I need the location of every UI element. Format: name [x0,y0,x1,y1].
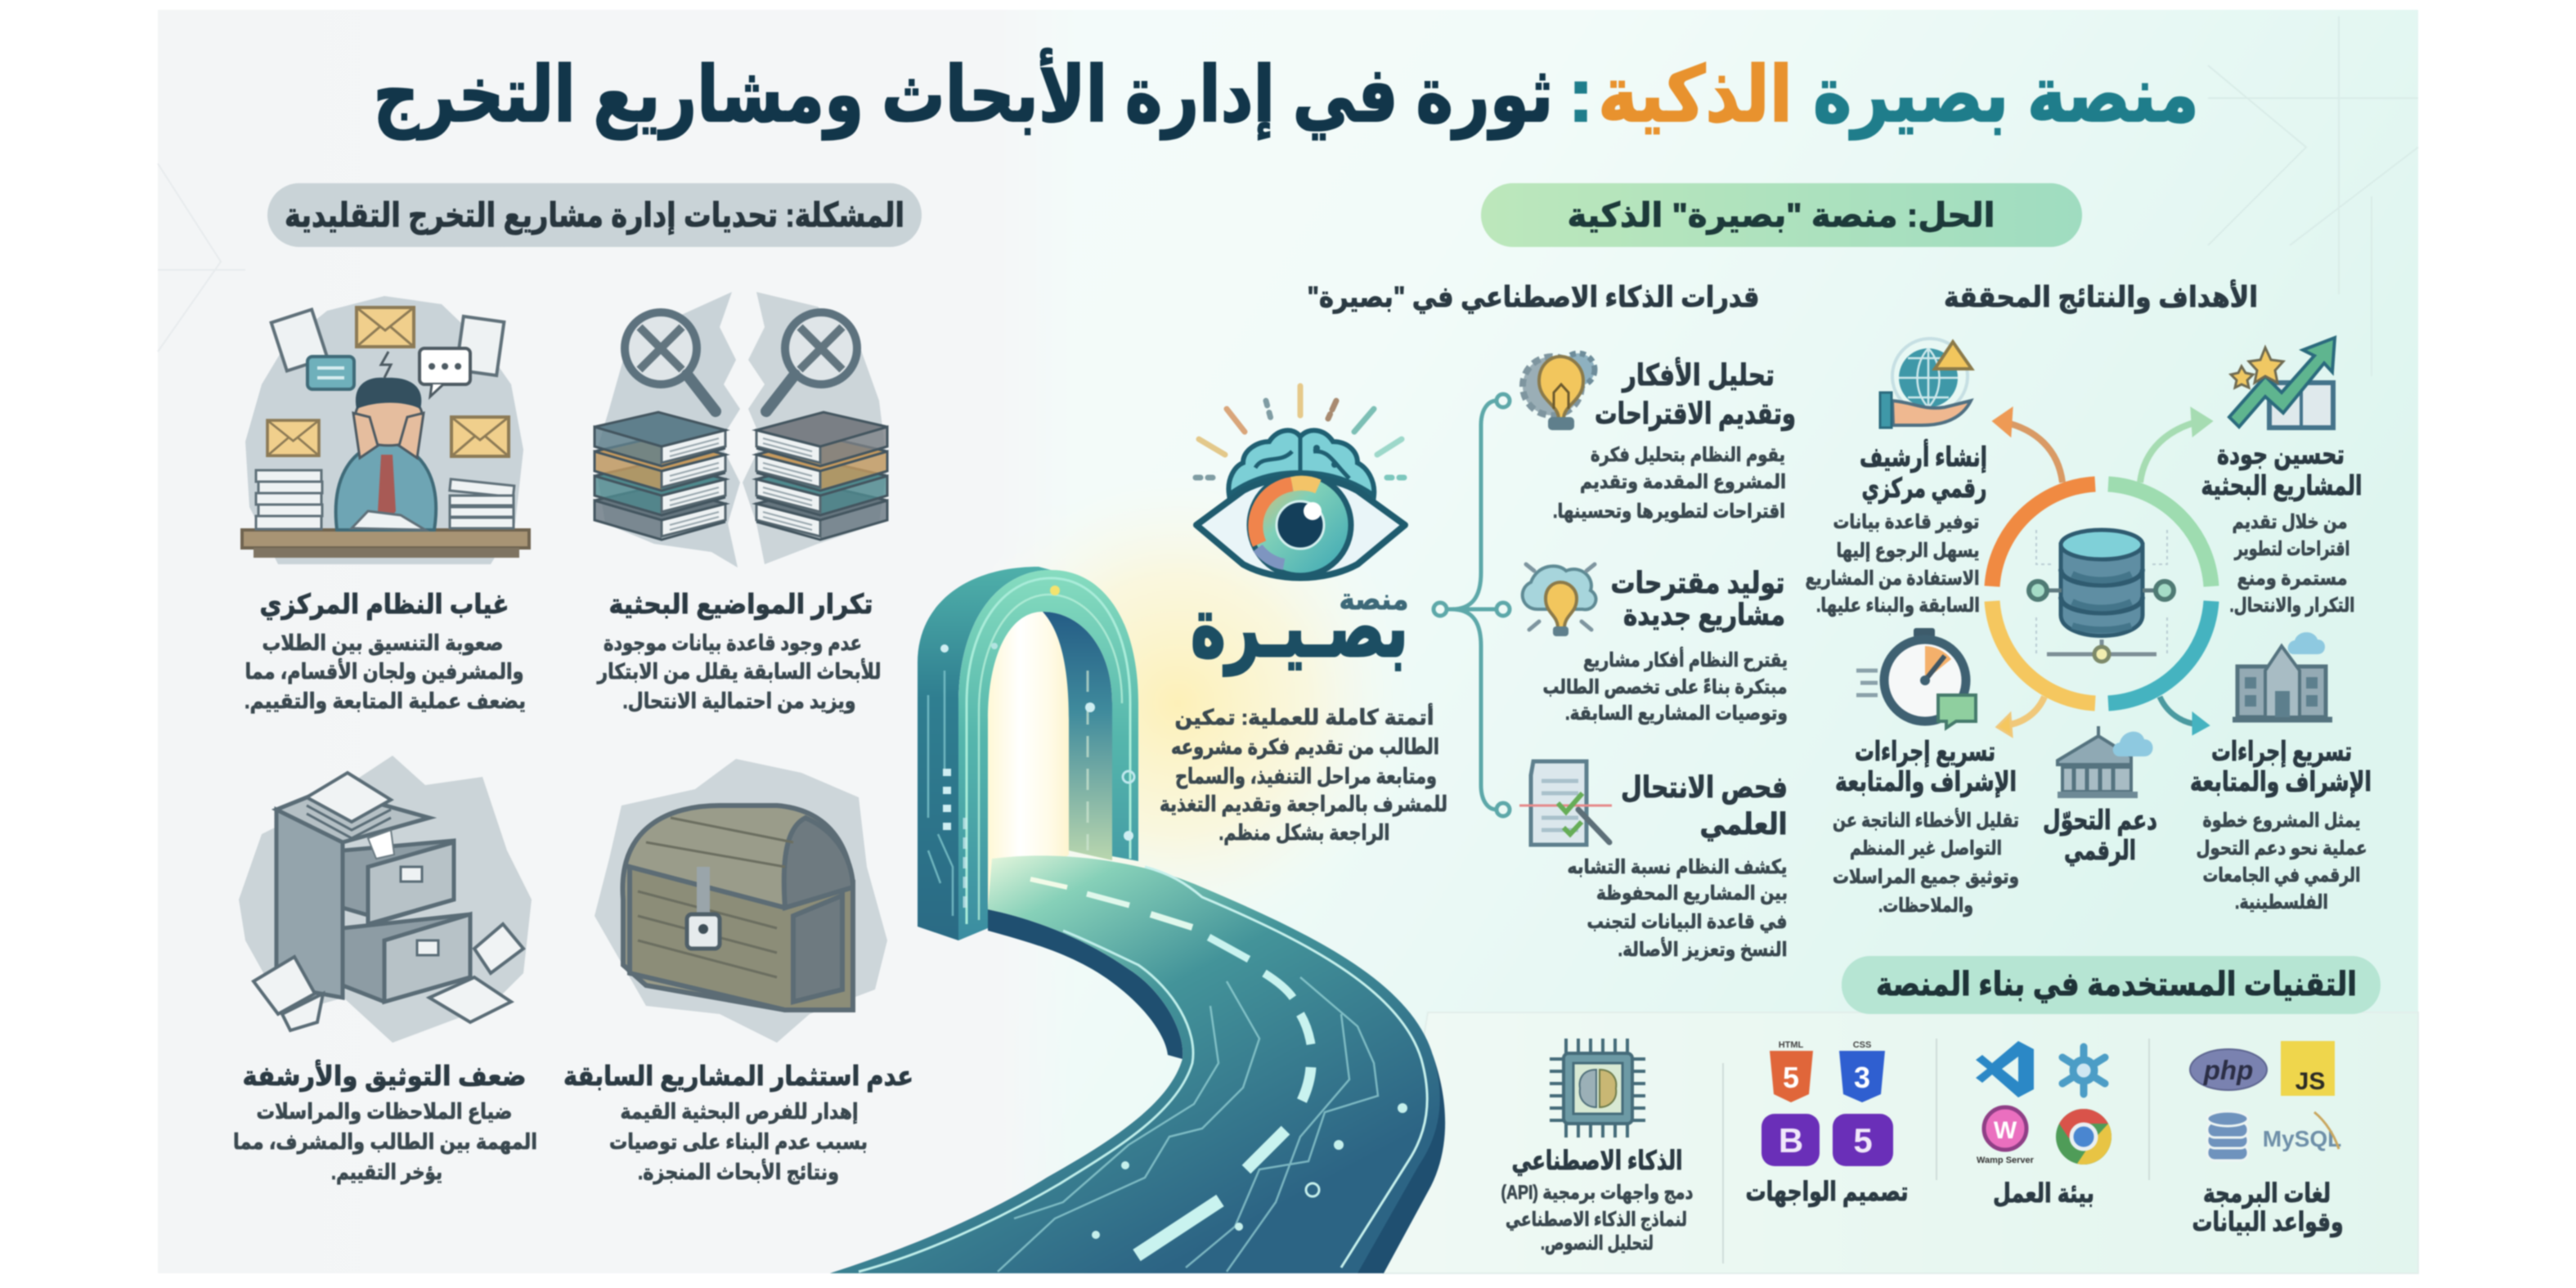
goal description: التكرار والانتحال. [2229,595,2355,617]
goal title [1835,736,2017,798]
problem description: ويزيد من احتمالية الانتحال. [623,689,855,714]
capability title: العلمي [1699,807,1788,841]
tech description: لتحليل النصوص. [1541,1232,1654,1254]
problem title: غياب النظام المركزي [260,589,509,621]
title: الذكية [1598,52,1793,137]
logo: Baseera eye and brain [1160,386,1447,846]
problem description: يؤخر التقييم. [331,1160,442,1185]
goal title [2190,736,2372,798]
goal title: الإشراف والمتابعة [2190,766,2372,798]
arrow: to digital archive [1994,409,2062,482]
goal title: تسريع إجراءات [2211,736,2352,768]
icon: WampServer: Wamp Server [1977,1156,2035,1165]
goal title and description: دعم التحوّل [2043,805,2157,837]
problem description: والمشرفين ولجان الأقسام، مما [245,658,523,684]
goal title: المشاريع البحثية [2201,470,2362,502]
capability title [1595,357,1796,431]
capability description: بين المشاريع المحفوظة [1596,882,1788,904]
capability description [1567,856,1788,961]
icon: PHP: php [2203,1055,2253,1085]
arrow: to research quality [2140,409,2211,482]
goal description: اقتراحات لتطوير [2234,538,2350,560]
problem section heading pill: المشكلة: تحديات إدارة مشاريع التخرج التقليدية [285,196,904,236]
capability: generating project proposals [1523,564,1788,725]
icon: Chrome [2056,1109,2112,1165]
platform description: للمشرف بالمراجعة وتقديم التغذية [1160,792,1447,817]
tech column dividers [1723,1039,2149,1263]
goal title: تحسين جودة [2217,439,2345,471]
goal title [2201,439,2362,502]
icon: database cylinder [2029,530,2174,662]
tech title: الذكاء الاصطناعي [1511,1146,1683,1176]
icon: MySQL [2263,1112,2341,1151]
problem description: بسبب عدم البناء على توصيات [609,1129,868,1155]
icon: CSS3 badge: CSS [1853,1040,1871,1050]
problem: repeated research topics [595,292,887,714]
capability description: مبتكرة بناءً على تخصص الطالب [1542,676,1788,698]
goal description: توفير قاعدة بيانات [1833,511,1979,533]
tech description: دمج واجهات برمجية (API) [1501,1182,1693,1204]
ring segments [1992,484,2211,703]
goal title and description: الرقمي [2064,835,2136,867]
icon: WampServer [1977,1107,2035,1165]
goal description: الفلسطينية. [2235,891,2328,913]
platform description: الراجعة بشكل منظم. [1218,820,1390,846]
tech description: لنماذج الذكاء الاصطناعي [1506,1209,1687,1231]
goal description: الرقمي في الجامعات [2203,864,2360,886]
icon: CSS3 badge [1839,1040,1885,1102]
tech title: بيئة العمل [1993,1178,2094,1208]
icon: locked treasure chest [595,759,887,1043]
problem description: المهمة بين الطالب والمشرف، مما [233,1129,537,1155]
arrow: to follow-up [2160,697,2208,734]
problem title: ضعف التوثيق والأرشفة [242,1059,527,1093]
icon: HTML5 badge [1770,1040,1813,1102]
goal description: عملية نحو دعم التحول [2197,837,2367,859]
goal description [1806,511,1980,617]
problem description [245,631,526,714]
capability title: مشاريع جديدة [1623,598,1785,632]
goal description [1833,808,2019,917]
goal description: السابقة والبناء عليها. [1816,595,1980,617]
solution section heading pill [1481,183,2082,247]
goal: improve project quality [2201,338,2362,617]
capability description [1553,444,1786,523]
icon: globe on hand [1880,339,1972,428]
goal description: والملاحظات. [1878,895,1973,917]
goal: speeding supervision, stopwatch [1833,628,2019,917]
problem description: يضعف عملية المتابعة والتقييم. [245,689,526,714]
goal: digital transformation support [2043,726,2157,867]
goal description: تقليل الأخطاء الناتجة عن [1833,808,2019,832]
icon: HTML5 badge: 5 [1783,1061,1799,1094]
problem: weak documentation and archiving [233,756,537,1185]
icon: HTML5 badge: HTML [1779,1040,1804,1050]
problem section heading pill [267,183,922,247]
platform description: ومتابعة مراحل التنفيذ، والسماح [1175,764,1437,789]
capability description: وتوصيات المشاريع السابقة. [1565,702,1788,725]
icon: Bootstrap badge: B [1779,1121,1803,1160]
title: ثورة في إدارة الأبحاث ومشاريع التخرج [373,49,1554,140]
icon: document with magnifier and check [1519,761,1612,845]
icon: MySQL: MySQL [2263,1126,2341,1151]
tech: interface design [1745,1040,1909,1207]
tech description [1501,1182,1693,1254]
icon: overwhelmed person at desk [242,296,529,564]
goal description: الاستفادة من المشاريع [1806,568,1979,590]
goal title: إنشاء أرشيف [1860,439,1987,473]
icon: JavaScript [2281,1041,2335,1096]
title: منصة بصيرة [1813,52,2199,140]
problem: unused previous projects [563,759,913,1185]
central database ring diagram [1992,409,2211,736]
capability description: النسخ وتعزيز الأصالة. [1618,937,1788,961]
problem description: ضياع الملاحظات والمراسلات [257,1099,512,1124]
problem description: للأبحاث السابقة يقلل من الابتكار [596,658,882,684]
goal description: يمثل المشروع خطوة [2203,810,2360,832]
capability: idea analysis [1523,353,1796,523]
goal description: التواصل غير المنظم [1850,837,2002,859]
icon: Bootstrap badge [1761,1114,1820,1166]
road: circuit highway [830,855,1445,1273]
tech title: تصميم الواجهات [1745,1177,1909,1207]
icon: CSS3 badge: 3 [1854,1061,1870,1094]
tech: artificial intelligence [1501,1039,1693,1254]
icon: open filing cabinet with papers [239,756,532,1043]
tech title: لغات البرمجة [2203,1178,2331,1209]
goal title and description [2043,805,2157,867]
capability title: تحليل الأفكار [1621,357,1775,393]
platform description: الطالب من تقديم فكرة مشروعه [1171,734,1439,760]
goal description [2229,511,2355,617]
problem description [233,1099,537,1185]
goal: central digital archive [1806,339,1987,617]
icon: database [2207,1111,2248,1160]
icon: cloud with lightbulb [1523,564,1596,636]
problem title: تكرار المواضيع البحثية [608,589,873,621]
icon: split books and magnifiers [595,292,887,568]
technologies panel background [1384,1012,2418,1273]
problem title: عدم استثمار المشاريع السابقة [563,1061,913,1093]
capability description: المشروع المقدمة وتقديم [1580,471,1786,493]
icon: rising arrow, stars and book [2229,338,2335,428]
connector tree [1434,394,1510,816]
capability description [1542,647,1788,725]
gate arch [918,567,1138,940]
tech: working environment [1976,1041,2112,1208]
icon: WampServer: W [1994,1117,2017,1144]
goal title: تسريع إجراءات [1855,736,1995,768]
tech: programming languages and databases [2190,1041,2344,1237]
heading: goals and results: الأهداف والنتائج المحققة [1944,279,2258,314]
goal description: يسهل الرجوع إليها [1837,540,1979,562]
technologies heading pill [1842,956,2381,1014]
goal description: من خلال تقديم [2233,511,2347,533]
capability title [1621,770,1788,841]
goal title: الإشراف والمتابعة [1835,766,2017,798]
capability: plagiarism check [1519,761,1788,961]
problem description [596,631,882,714]
goal description: مستمرة ومنع [2237,568,2347,590]
platform description: أتمتة كاملة للعملية: تمكين [1174,703,1434,730]
icon: snowflake [2062,1047,2105,1094]
problem: no central system [242,296,529,714]
capability description: يقترح النظام أفكار مشاريع [1583,647,1788,671]
capability title: وتقديم الاقتراحات [1595,397,1796,431]
capability title: توليد مقترحات [1611,566,1784,600]
icon: eye with brain [1196,386,1405,577]
problem description: صعوبة التنسيق بين الطلاب [262,631,504,656]
problem description: ونتائج الأبحاث المنجزة. [638,1159,839,1185]
icon: JavaScript: JS [2296,1068,2325,1095]
title: : [1568,52,1594,137]
goal title: رقمي مركزي [1861,473,1987,505]
arrow: to supervision [1997,697,2044,736]
capability title: فحص الانتحال [1621,770,1788,805]
heading: AI capabilities: قدرات الذكاء الاصطناعي في "بصيرة" [1307,281,1760,314]
icon: VS Code [1976,1041,2034,1097]
icon: AI chip [1550,1039,1645,1138]
goal description: وتوثيق جميع المراسلات [1833,866,2019,888]
tech title: وقواعد البيانات [2192,1207,2344,1237]
icon: Bootstrap 5 badge: 5 [1853,1121,1873,1160]
technologies heading pill: التقنيات المستخدمة في بناء المنصة [1876,967,2357,1003]
icon: lightbulb with gears [1523,353,1595,430]
logo text: منصة [1340,582,1408,616]
capability description: يقوم النظام بتحليل فكرة [1591,444,1785,466]
icon: bank and cloud [2058,726,2152,798]
goal description [2197,810,2367,913]
problem description [609,1099,868,1185]
capability description: في قاعدة البيانات لتجنب [1586,911,1788,933]
capability title [1611,566,1785,632]
icon: stopwatch and chat [1856,628,1976,728]
solution section heading pill: الحل: منصة "بصيرة" الذكية [1567,196,1995,235]
problem description: عدم وجود قاعدة بيانات موجودة [604,631,862,656]
icon: university building and cloud [2233,632,2332,720]
problem description: إهدار للفرص البحثية القيمة [620,1099,859,1124]
icon: Bootstrap 5 badge [1833,1114,1893,1166]
goal title [1860,439,1987,505]
tech title [2192,1178,2344,1237]
platform description [1160,703,1447,846]
icon: PHP [2190,1049,2267,1090]
capability description: يكشف النظام نسبة التشابه [1567,856,1788,878]
logo text: بصـيـرة [1191,582,1408,676]
capability description: اقتراحات لتطويرها وتحسينها. [1553,500,1785,523]
goal: speeding supervision, university [2190,632,2372,913]
